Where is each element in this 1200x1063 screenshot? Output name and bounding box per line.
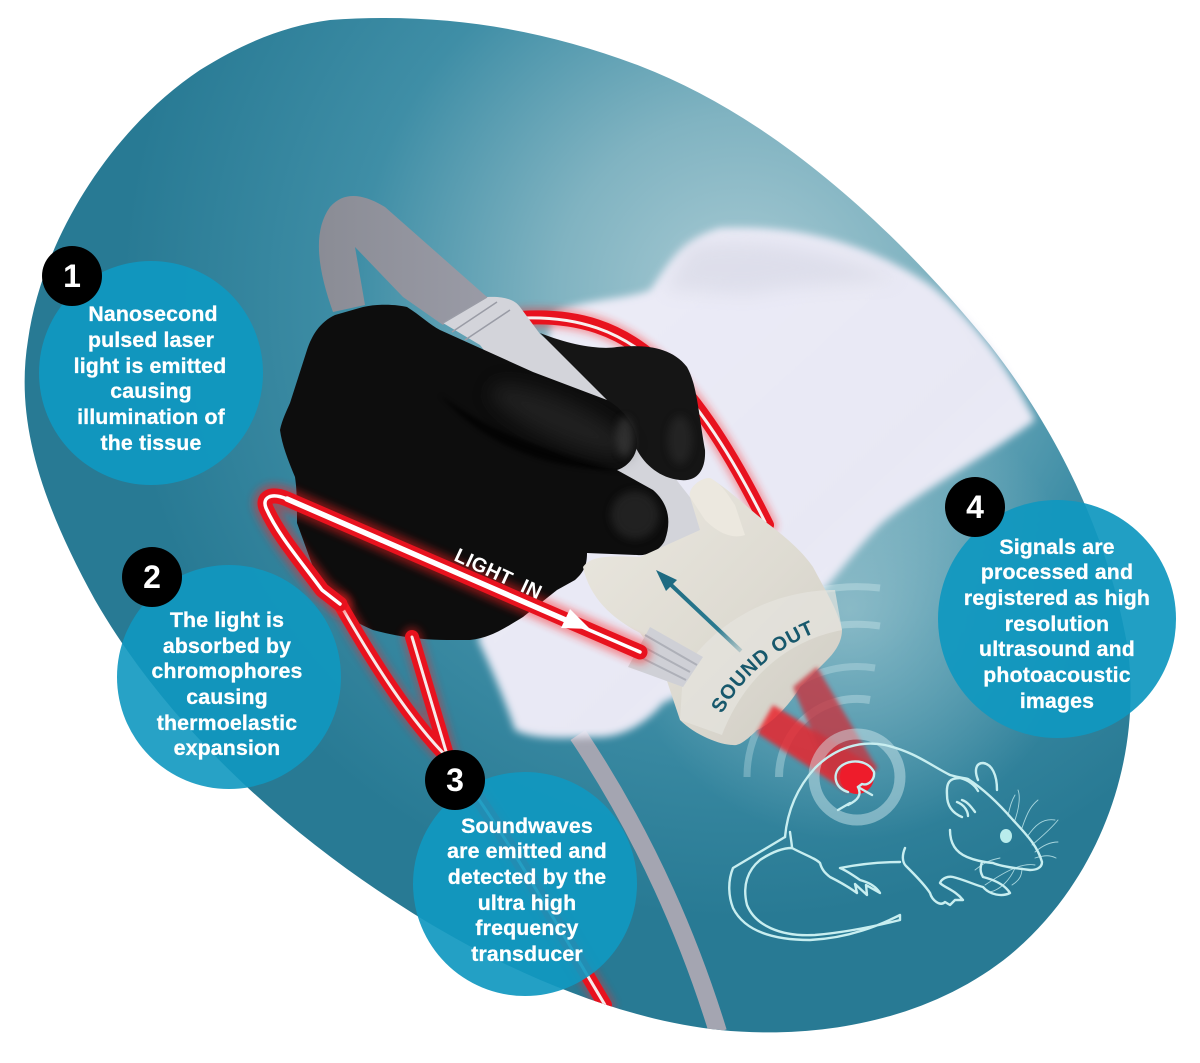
caption 3: frequency [475, 916, 579, 940]
upper red fiber loop [520, 317, 767, 525]
sound wave arcs behind probe [747, 587, 880, 777]
caption 1: causing [110, 379, 192, 403]
number badge 3: 3 [446, 762, 464, 798]
lab coat sleeve [478, 228, 1035, 738]
red laser fiber with light in arrow [265, 496, 640, 652]
black glove: hand [280, 305, 692, 640]
mouse outline with kidney [729, 744, 1058, 940]
ultrasound probe body [583, 478, 842, 745]
grey tube behind hand [319, 196, 487, 325]
ring around target [814, 734, 900, 820]
lower fiber branches [340, 604, 605, 1005]
number badge 2 [122, 547, 182, 607]
sound out arrow [656, 570, 741, 651]
caption 2: causing [186, 685, 268, 709]
handle collar and grip [443, 297, 705, 560]
caption 4: photoacoustic [983, 663, 1131, 687]
caption 4: resolution [1005, 612, 1109, 636]
label: sound out: SOUND OUT [712, 620, 810, 712]
caption 1: illumination of [77, 405, 226, 429]
caption 1: the tissue [101, 431, 201, 455]
step 3 [413, 750, 637, 996]
caption 3: transducer [471, 942, 583, 966]
caption 4: images [1020, 689, 1094, 713]
caption 1: Nanosecond [88, 302, 218, 326]
caption 4: Signals are [999, 535, 1115, 559]
number badge 1 [42, 246, 102, 306]
number badge 4: 4 [966, 489, 984, 525]
caption 4: ultrasound and [979, 637, 1135, 661]
caption 2: chromophores [152, 659, 302, 683]
caption 1: light is emitted [74, 354, 226, 378]
caption 1: pulsed laser [88, 328, 214, 352]
number badge 3 [425, 750, 485, 810]
white arrowhead on fiber [561, 609, 590, 629]
caption 4: registered as high [964, 586, 1150, 610]
caption 4: processed and [981, 560, 1133, 584]
step 4 [938, 477, 1176, 738]
number badge 4 [945, 477, 1005, 537]
step 2 [117, 547, 341, 789]
label: light in: LIGHT IN [451, 545, 545, 604]
probe fibre connector [628, 627, 703, 687]
caption 2: absorbed by [163, 634, 291, 658]
caption 3: detected by the [448, 865, 606, 889]
kidney outline [836, 761, 874, 810]
black glove: rear finger [540, 333, 705, 480]
caption 3: Soundwaves [461, 814, 593, 838]
red kidney target [840, 760, 874, 794]
grey lower cable [578, 735, 718, 1032]
step 1 [39, 246, 263, 485]
caption 3: are emitted and [447, 839, 607, 863]
caption 2: expansion [174, 736, 280, 760]
number badge 2: 2 [143, 559, 161, 595]
caption 2: The light is [170, 608, 284, 632]
laser beams into kidney [757, 667, 877, 792]
caption 3: ultra high [478, 891, 576, 915]
caption 2: thermoelastic [157, 711, 297, 735]
number badge 1: 1 [63, 258, 81, 294]
